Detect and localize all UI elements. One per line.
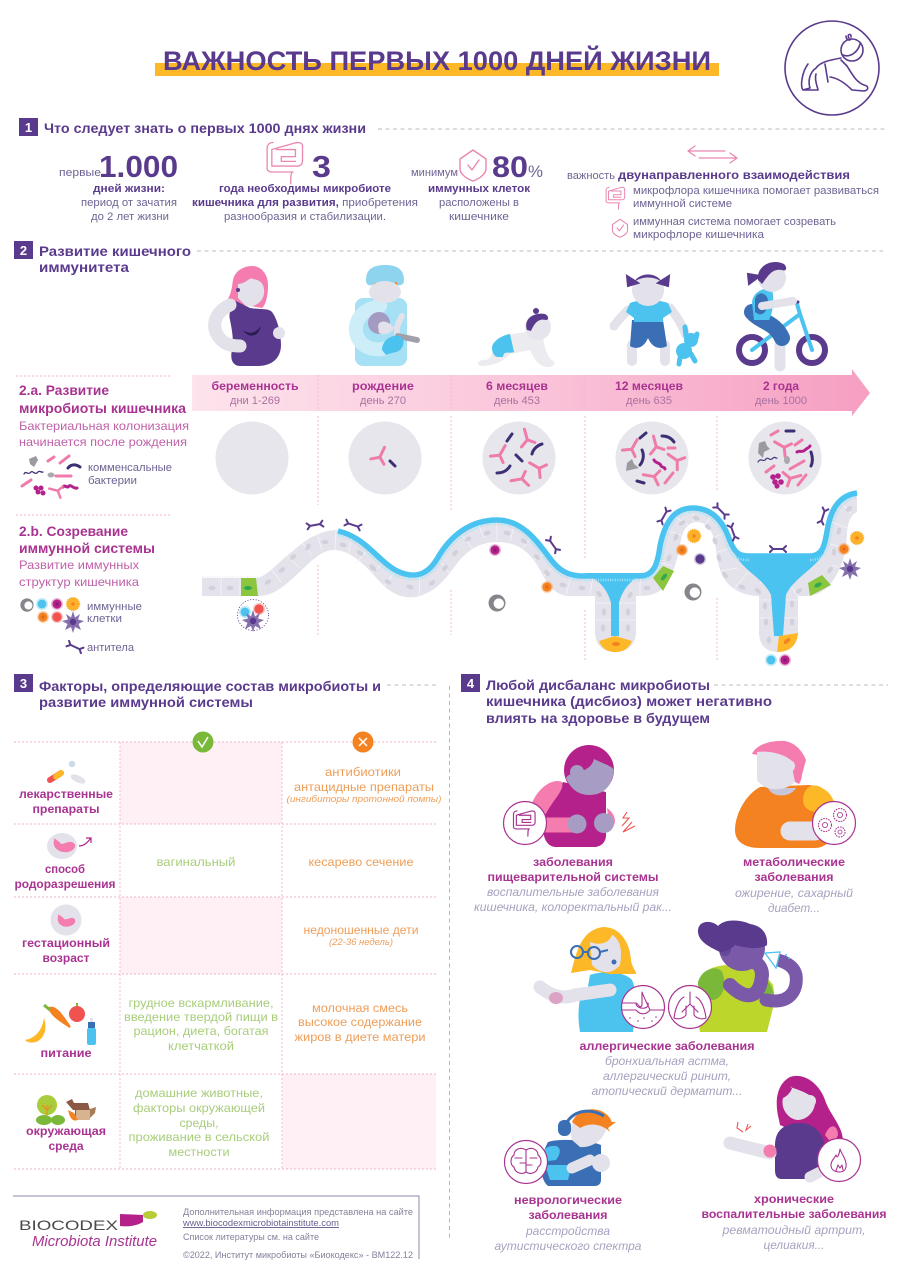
row: nutrition: грудное вскармливание, [128,996,274,1010]
timeline labels: день 635 [626,395,672,407]
label: 2.b immune system maturation: иммунной системы [19,540,155,556]
section 4 heading: 4 [467,676,475,691]
disease: chronic inflammatory: целиакия... [764,1238,824,1252]
icon: skin circle [622,986,664,1028]
stat: 3 years: года необходимы микробиоте [219,183,391,195]
row: medication [19,761,442,816]
timeline labels: день 1000 [755,395,807,407]
circle: pregnancy [216,422,288,494]
stat: 80 percent [411,150,543,223]
row: delivery mode: родоразрешения [14,877,116,891]
disease: digestive: заболевания [533,855,613,869]
section 2 heading: Развитие кишечного [39,243,191,259]
stat: bidirectional interaction: важность [567,170,615,182]
legend: antibodies [66,641,135,654]
icon: tree and animals [36,1095,96,1125]
factors table [14,732,442,1169]
icon: shield [460,150,486,181]
logo [19,1211,157,1250]
stat: 80 percent: расположены в [439,197,519,209]
disease: neurological: расстройства [525,1224,610,1238]
stat: 80 percent: иммунных клеток [428,183,531,195]
timeline labels: беременность [212,379,298,393]
footer: ©2022, Институт микробиоты «Биокодекс» - BM122.12 [183,1250,413,1261]
label: 2.a microbiota development: начинается после рождения [19,435,187,449]
cell nuclei [208,505,853,644]
section 3 heading: Факторы, определяющие состав микробиоты и [39,678,381,694]
stat: 80 percent: минимум [411,167,458,179]
green cell 3 [808,575,831,596]
icon: small intestine [606,187,625,209]
row: environment: проживание в сельской [128,1130,270,1144]
disease: allergic: атопический дерматит... [592,1084,742,1098]
row: environment: факторы окружающей [133,1101,265,1115]
label: 2.a microbiota development: 2.a. Развитие [19,382,109,398]
timeline labels: 2 года [763,379,799,393]
legend: antibodies: антитела [87,642,135,654]
stat: 80 percent: % [528,162,543,181]
row: environment: среда [48,1139,84,1153]
circle: birth [348,422,422,494]
row: nutrition: высокое содержание [298,1015,422,1029]
disease: digestive: кишечника, колоректальный рак... [474,900,672,914]
section 3 heading [14,674,437,710]
figure: nurse with newborn [355,265,417,366]
timeline labels: день 270 [360,395,406,407]
timeline labels: 6 месяцев [486,379,548,393]
disease: digestive [474,745,672,914]
timeline arrow [192,369,870,416]
legend: immune cells: клетки [87,613,122,625]
figure: girl with glasses and rash [540,927,636,1032]
row: nutrition [25,996,426,1060]
row: nutrition: рацион, диета, богатая [134,1024,268,1038]
stat: 80 percent: 80 [492,151,528,184]
disease: chronic inflammatory: хронические [754,1192,834,1206]
row: medication: (ингибиторы протонной помпы) [286,794,442,805]
footer: www.biocodexmicrobiotainstitute.com [182,1218,339,1229]
icon: small shield [612,219,628,237]
icon: flame circle [818,1138,860,1182]
row: environment: окружающая [26,1124,106,1138]
footer [13,1196,419,1261]
label: 2.b immune system maturation: структур кишечника [19,575,139,589]
figure: person with stomach ache [528,745,635,847]
disease: metabolic [735,741,856,915]
circle: 12 months [616,422,688,494]
section 1 heading: 1 [25,120,32,135]
stat: bidirectional interaction: двунаправленного взаимодействия [618,168,850,182]
section 4 heading: влиять на здоровье в будущем [486,710,710,726]
row: delivery mode [14,833,414,891]
row: gestational age: недоношенные дети [304,923,418,937]
row: medication: лекарственные [19,787,113,801]
section 1 heading: Что следует знать о первых 1000 днях жизни [44,120,366,136]
immune cluster [238,600,268,632]
row: gestational age [22,904,418,965]
figure: child on balance bike [739,262,825,366]
row: medication: антацидные препараты [294,780,434,794]
label: 2.b immune system maturation [16,515,170,589]
disease: neurological: аутистического спектра [494,1239,642,1253]
disease: metabolic: ожирение, сахарный [735,886,853,900]
epithelium band [202,492,857,652]
stat: 1000 days: первые [59,167,101,179]
stat: bidirectional interaction: микрофлора кишечника помогает развиваться [633,185,879,197]
timeline labels [212,379,807,407]
disease: neurological: заболевания [528,1208,608,1222]
section 4 heading: кишечника (дисбиоз) может негативно [486,693,772,709]
timeline labels: 12 месяцев [615,379,683,393]
immune cells [488,530,864,666]
legend: immune cells [20,598,142,633]
row: gestational age: возраст [42,951,90,965]
logo: Microbiota Institute [32,1233,157,1250]
section 2 heading [14,241,883,275]
row: gestational age: гестационный [22,936,110,950]
legend: commensal bacteria [22,456,172,498]
row: nutrition: питание [40,1046,92,1060]
green cell 1 [241,578,258,596]
icon: cross [352,732,374,752]
disease: allergic: бронхиальная астма, [605,1054,729,1068]
figure: boy with headphones [540,1109,616,1186]
disease: chronic inflammatory [702,1076,886,1252]
stat: bidirectional interaction: иммунной системе [633,198,732,210]
icon: gears circle [812,802,856,844]
figure: crawling baby [478,308,554,367]
lumen fills [585,573,645,636]
cell dividers [221,503,851,620]
icon: crawling baby in circle [785,21,879,115]
stat: 1000 days [59,149,178,223]
disease: allergic: аллергический ринит, [603,1069,731,1083]
icon: intestine circle [504,802,546,844]
disease: chronic inflammatory: воспалительные заболевания [702,1207,886,1221]
antibodies [307,503,828,553]
stat: 3 years [192,142,418,223]
section 3 heading: развитие иммунной системы [39,694,253,710]
disease: allergic [540,920,796,1098]
disease: digestive: пищеварительной системы [488,870,658,884]
disease: metabolic: диабет... [768,901,820,915]
stat: 1000 days: период от зачатия [81,197,177,209]
icon: pills [50,761,87,786]
timeline labels: рождение [352,379,414,393]
icon: arrows [688,146,737,163]
icon: check [192,732,214,752]
disease: digestive: воспалительные заболевания [487,885,660,899]
row: gestational age: (22-36 недель) [329,937,393,948]
row: environment: местности [168,1145,230,1159]
label: 2.a microbiota development: Бактериальная колонизация [19,419,189,433]
row: delivery mode: вагинальный [156,855,236,869]
timeline labels: дни 1-269 [230,395,280,407]
figure: overweight person [735,741,835,848]
stat: 1000 days: дней жизни: [93,183,165,195]
label: 2.b immune system maturation: 2.b. Созревание [19,523,128,539]
circle: 6 months [482,422,556,494]
circle: 2 years [748,422,822,494]
row: medication: препараты [32,802,100,816]
logo: BIOCODEX [19,1217,119,1233]
row: nutrition: введение твердой пищи в [124,1010,278,1024]
disease: chronic inflammatory: ревматоидный артрит, [721,1223,866,1237]
figure: woman sneezing [698,920,796,1032]
legend: commensal bacteria: комменсальные [88,462,172,474]
row: delivery mode: кесарево сечение [308,855,414,869]
figure: pregnant woman [215,266,285,366]
stat: bidirectional interaction [567,146,879,241]
icon: brain circle [504,1140,548,1184]
stat: bidirectional interaction: иммунная система помогает созревать [633,216,836,228]
section 4 heading [461,674,888,726]
label: 2.a microbiota development: микробиоты кишечника [19,400,186,416]
row: medication: антибиотики [325,765,401,779]
intestinal epithelium diagram [202,492,864,666]
stat: bidirectional interaction: микрофлоре кишечника [633,229,765,241]
label: 2.a microbiota development [16,376,189,449]
icon: food [25,1003,96,1045]
figure: toddler with teddy [614,274,698,364]
legend: commensal bacteria: бактерии [88,475,137,487]
section 1 heading [19,118,888,136]
yellow cell 1 [599,636,632,652]
stat: 3 years: 3 [312,149,331,184]
stat: 1000 days: 1.000 [99,149,178,184]
timeline labels: день 453 [494,395,540,407]
row: nutrition: клетчаткой [168,1039,234,1053]
row: environment [26,1086,270,1159]
stat: 80 percent: кишечнике [449,211,509,223]
disease: metabolic: заболевания [754,870,834,884]
stat: 3 years: кишечника для развития, приобретения [192,197,418,209]
disease: neurological: неврологические [514,1193,622,1207]
row: nutrition: жиров в диете матери [294,1030,426,1044]
title: ВАЖНОСТЬ ПЕРВЫХ 1000 ДНЕЙ ЖИЗНИ [163,45,711,76]
disease: neurological [494,1109,642,1253]
row: environment: среды, [180,1116,218,1130]
disease: metabolic: метаболические [743,855,845,869]
icon: fetus [50,904,82,936]
icon: fetus with arrow [47,833,91,859]
section 3 heading: 3 [20,676,27,691]
section 2 heading: 2 [20,243,27,258]
row: delivery mode: способ [45,862,85,876]
stat: 1000 days: до 2 лет жизни [91,211,169,223]
section 4 heading: Любой дисбаланс микробиоты [486,677,710,693]
disease: allergic: аллергические заболевания [580,1039,754,1053]
icon: intestine [267,142,303,184]
yellow cell 2 [777,633,798,652]
label: 2.b immune system maturation: Развитие иммунных [19,558,139,572]
figure: woman with arm pain [730,1076,843,1179]
footer: Дополнительная информация представлена на сайте [183,1207,413,1218]
microbiota circles [216,422,822,494]
legend: immune cells: иммунные [87,601,142,613]
footer: Список литературы см. на сайте [183,1232,319,1243]
section 2 heading: иммунитета [39,259,129,275]
icon: lungs circle [668,986,712,1028]
green cell 2 [653,566,674,591]
stat: 3 years: разнообразия и стабилизации. [224,211,386,223]
mucus layer [338,493,857,576]
row: environment: домашние животные, [135,1086,263,1100]
row: nutrition: молочная смесь [312,1001,408,1015]
